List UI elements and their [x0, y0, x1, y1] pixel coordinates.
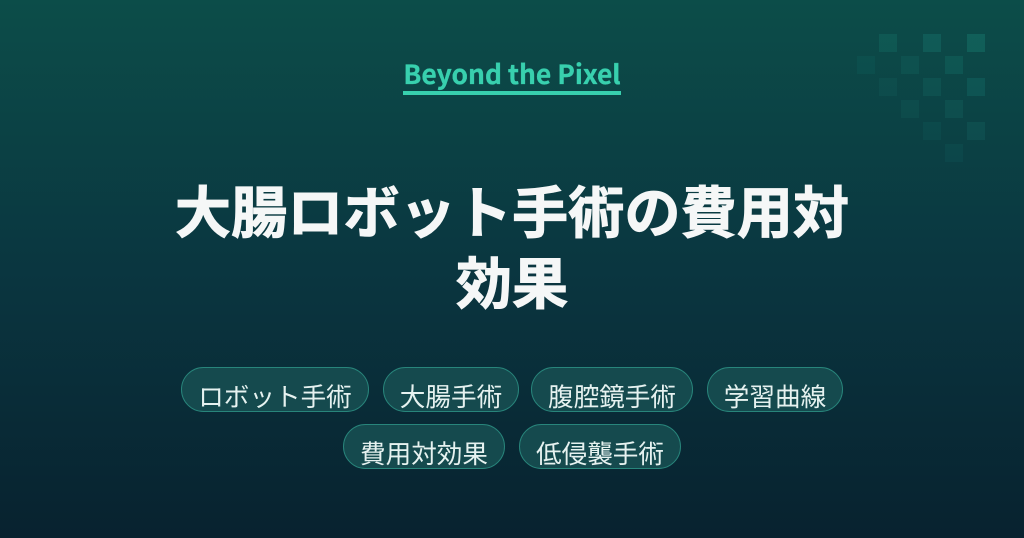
title: 大腸ロボット手術の費用対 — [175, 169, 849, 250]
brand label: Beyond the Pixel: Beyond the Pixel — [403, 53, 621, 92]
tag: 費用対効果: 費用対効果 — [360, 434, 488, 471]
title — [175, 169, 849, 321]
tag: 低侵襲手術: 低侵襲手術 — [536, 434, 664, 471]
tag: ロボット手術: ロボット手術 — [198, 377, 352, 414]
tag: 大腸手術 — [383, 367, 519, 412]
tag: ロボット手術 — [181, 367, 369, 412]
tag: 腹腔鏡手術: 腹腔鏡手術 — [548, 377, 676, 414]
decorative pixel grid — [879, 34, 985, 140]
tag: 大腸手術: 大腸手術 — [400, 377, 502, 414]
tag: 低侵襲手術 — [519, 424, 681, 469]
tag: 費用対効果 — [343, 424, 505, 469]
title: 効果 — [456, 240, 568, 321]
tag: 腹腔鏡手術 — [531, 367, 693, 412]
tag: 学習曲線: 学習曲線 — [724, 377, 826, 414]
tag: 学習曲線 — [707, 367, 843, 412]
